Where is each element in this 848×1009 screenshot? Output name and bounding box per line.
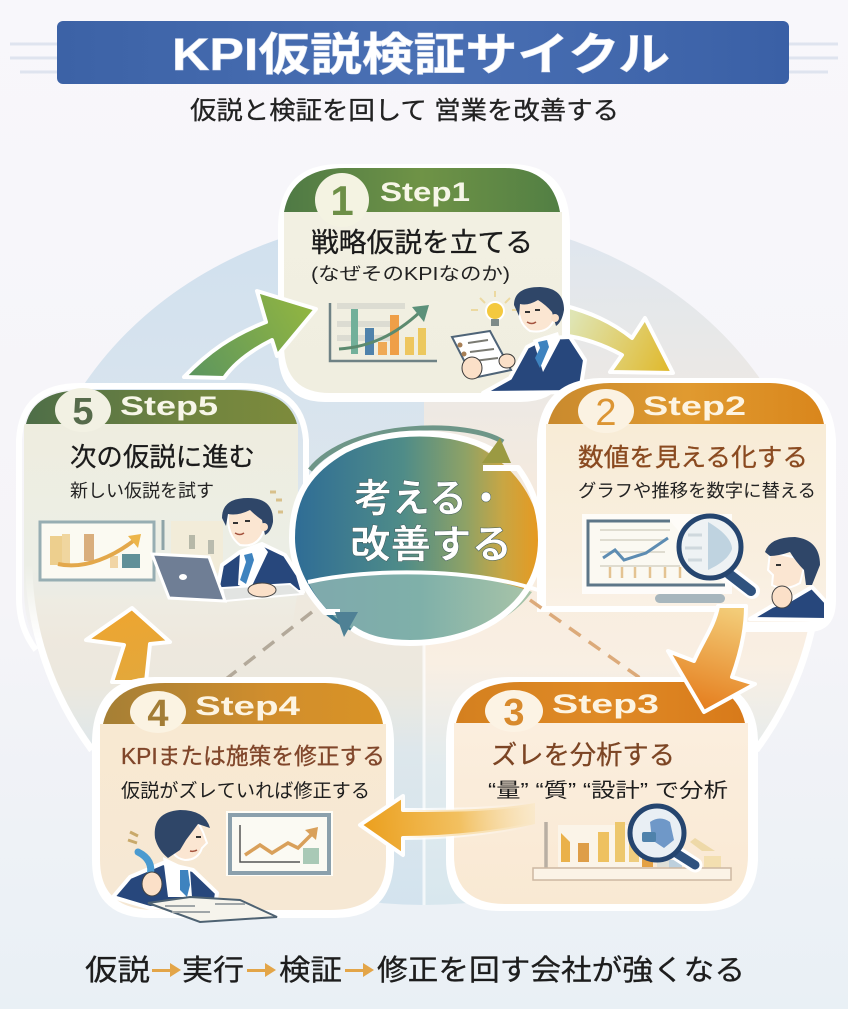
panel: step 5 bbox=[19, 386, 306, 650]
step 4 label: Step4 bbox=[195, 691, 300, 721]
chart: trend screen bbox=[226, 811, 333, 876]
subtitle: 仮説と検証を回して 営業を改善する bbox=[190, 97, 619, 125]
bottom arrow 1 bbox=[152, 963, 181, 977]
step 3 number badge: 3 bbox=[503, 692, 525, 734]
step 5 label: Step5 bbox=[120, 391, 218, 421]
step 1 heading: 戦略仮説を立てる bbox=[311, 228, 533, 258]
step 4 number badge bbox=[130, 691, 186, 735]
background cycle disc bbox=[29, 215, 819, 905]
step 2 number badge: 2 bbox=[595, 392, 617, 434]
step 3 heading: ズレを分析する bbox=[491, 740, 675, 770]
circular arrow head top bbox=[482, 438, 511, 463]
title banner: KPI仮説検証サイクル bbox=[172, 29, 670, 80]
arrow: step 1 to step 2 bbox=[562, 305, 673, 373]
bottom message: 仮説 bbox=[85, 954, 150, 987]
bottom arrow 2 bbox=[247, 963, 276, 977]
person with book bbox=[113, 810, 277, 922]
arrow: step 2 to step 3 bbox=[668, 606, 755, 712]
step 2 subtext: グラフや推移を数字に替える bbox=[578, 481, 816, 501]
step 1 subtext: (なぜそのKPIなのか) bbox=[311, 264, 510, 284]
step 2 heading: 数値を見える化する bbox=[578, 444, 808, 472]
panel: step 1 bbox=[278, 164, 585, 402]
panel: step 2 bbox=[537, 378, 836, 632]
panel: step 3 bbox=[446, 677, 758, 911]
step 2 number badge bbox=[578, 389, 634, 434]
bottom message: 検証 bbox=[279, 954, 342, 987]
step 3 label: Step3 bbox=[552, 689, 659, 719]
dashed link lines bbox=[212, 600, 640, 690]
person with laptop bbox=[152, 492, 303, 601]
chart: presentation screens bbox=[40, 520, 223, 580]
step 5 number badge: 5 bbox=[72, 391, 94, 433]
step 5 heading: 次の仮説に進む bbox=[70, 442, 255, 472]
icon: magnifying glass bbox=[679, 516, 752, 591]
circular arrow head bottom bbox=[335, 612, 358, 637]
arrow: step 5 to step 1 bbox=[184, 291, 316, 378]
step 4 subtext: 仮説がズレていれば修正する bbox=[121, 780, 370, 802]
center circle: think and improve: 改善する bbox=[350, 524, 512, 567]
step 1 label: Step1 bbox=[380, 177, 470, 207]
step 5 number badge bbox=[55, 388, 111, 433]
arrow: step 3 to step 4 bbox=[360, 796, 535, 855]
step 2 label: Step2 bbox=[643, 391, 746, 421]
chart: rising bars bbox=[330, 303, 437, 361]
bottom message: 実行 bbox=[182, 954, 244, 987]
person with clipboard bbox=[452, 287, 585, 393]
person thinking bbox=[750, 537, 826, 620]
bottom arrow 3 bbox=[345, 963, 374, 977]
icon: magnifying glass bbox=[630, 806, 695, 865]
step 4 number badge: 4 bbox=[147, 693, 169, 735]
step 5 subtext: 新しい仮説を試す bbox=[70, 481, 214, 501]
step 1 number badge bbox=[315, 173, 369, 227]
bottom message bbox=[85, 954, 745, 987]
chart: line chart screen bbox=[582, 514, 732, 603]
step 1 number badge: 1 bbox=[330, 177, 354, 224]
chart: analysis bars bbox=[533, 822, 731, 880]
center circle: think and improve bbox=[292, 428, 541, 643]
step 3 number badge bbox=[485, 690, 543, 734]
arrow: step 4 to step 5 bbox=[86, 608, 170, 682]
step 3 subtext: “量” “質” “設計” で分析 bbox=[488, 779, 728, 802]
core text: 考える・ bbox=[354, 478, 505, 521]
icon: light bulb bbox=[471, 291, 519, 326]
panel: step 4 bbox=[92, 677, 394, 922]
bottom message: 修正を回す会社が強くなる bbox=[377, 954, 745, 987]
title banner bbox=[10, 21, 838, 84]
step 4 heading: KPIまたは施策を修正する bbox=[121, 743, 385, 769]
